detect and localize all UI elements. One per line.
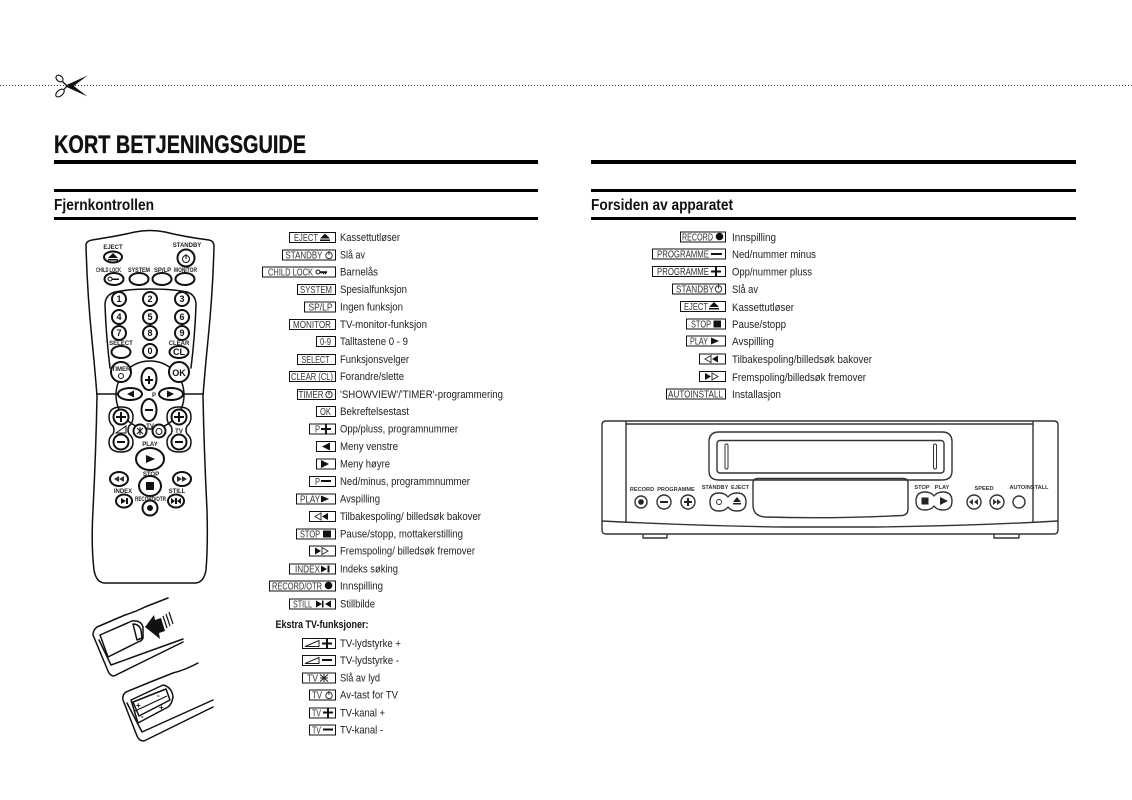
remote control illustration: TV (175, 429, 183, 435)
remote control illustration: 3 (179, 294, 185, 304)
key: tv channel down (310, 724, 383, 736)
key: play: Avspilling (340, 494, 380, 506)
key: standby (672, 284, 758, 296)
illustration: inserting batteries: - (157, 691, 160, 700)
VCR front panel illustration (602, 421, 1058, 538)
key: standby: Slå av (732, 284, 758, 296)
heading: front of the device: Forsiden av apparatet (591, 197, 733, 214)
key: play: PLAY (690, 336, 708, 348)
remote control illustration: MONITOR (174, 268, 198, 274)
VCR front panel illustration: AUTOINSTALL (1010, 485, 1049, 491)
remote control illustration: CLEAR (169, 341, 190, 347)
VCR front panel illustration: PLAY (935, 485, 949, 491)
VCR front panel illustration: PROGRAMME (657, 487, 695, 493)
key: select: SELECT (302, 355, 330, 366)
key: still: STILL (293, 600, 312, 610)
VCR front panel illustration: RECORD (630, 487, 654, 493)
key: clear: CLEAR (CL) (291, 372, 333, 383)
key: sp/lp: Ingen funksjon (340, 302, 403, 314)
remote control illustration: P (152, 393, 156, 399)
key: clear: Forandre/slette (340, 371, 404, 383)
key: programme minus: PROGRAMME (657, 250, 709, 260)
key: fast forward (700, 372, 866, 384)
remote control illustration: 7 (116, 328, 122, 338)
key: system (298, 284, 407, 296)
key: tv power: TV (312, 690, 322, 702)
VCR front panel illustration: EJECT (731, 485, 750, 491)
key: record: RECORD (682, 232, 713, 244)
key: system: Spesialfunksjon (340, 284, 407, 296)
key: record: Innspilling (340, 580, 383, 592)
key: fast forward: Fremspoling/billedsøk fremover (732, 372, 866, 384)
key: child lock (262, 266, 378, 278)
remote control illustration: 6 (179, 312, 185, 322)
key: eject: EJECT (684, 302, 708, 313)
illustration: inserting batteries (123, 663, 213, 741)
key: tv power (310, 690, 399, 702)
remote control illustration: CL (173, 347, 185, 357)
key: stop: Pause/stopp (732, 319, 786, 331)
key: index: INDEX (295, 564, 320, 576)
key: record: RECORD/OTR (272, 582, 322, 592)
key: programme minus (652, 249, 816, 261)
key: eject: Kassettutløser (340, 232, 400, 244)
remote control illustration: PLAY (142, 442, 158, 448)
key: tv mute (302, 672, 380, 684)
key: monitor: TV-monitor-funksjon (340, 319, 427, 331)
key: index: Indeks søking (340, 564, 398, 576)
key: programme minus: Ned/nummer minus (732, 249, 816, 261)
key: standby: Slå av (340, 250, 365, 262)
VCR front panel illustration: STANDBY (702, 485, 729, 491)
key: rewind: Tilbakespoling/billedsøk bakover (732, 354, 872, 366)
key: eject (680, 302, 794, 314)
key: child lock: Barnelås (340, 266, 378, 278)
key: still (290, 598, 375, 610)
key: p plus: P (315, 424, 320, 436)
key: index (290, 564, 398, 576)
key: menu left: Meny venstre (340, 441, 398, 453)
illustration: inserting batteries: + (159, 703, 164, 712)
key: rewind: Tilbakespoling/ billedsøk bakover (340, 511, 481, 523)
key: fast forward: Fremspoling/ billedsøk fremover (340, 546, 475, 558)
key: play (686, 336, 774, 348)
key: tv channel up: TV (312, 708, 321, 720)
key: play: PLAY (300, 494, 320, 506)
key: p minus: Ned/minus, programmnummer (340, 476, 470, 488)
key: 0-9: Talltastene 0 - 9 (340, 336, 408, 348)
key: sp/lp (304, 302, 403, 314)
remote control illustration: EJECT (103, 245, 123, 251)
key: monitor: MONITOR (293, 320, 331, 331)
key: ok (316, 406, 409, 418)
key: tv volume up (302, 638, 401, 650)
remote control illustration: RECORD/OTR (135, 497, 167, 503)
key: programme plus (652, 266, 812, 278)
key: ok: Bekreftelsestast (340, 406, 409, 418)
key: system: SYSTEM (300, 285, 332, 296)
remote control illustration: 5 (147, 312, 153, 322)
key: eject: EJECT (294, 233, 318, 244)
key: tv channel up (310, 708, 385, 720)
key: record (680, 232, 776, 244)
key: record: Innspilling (732, 232, 776, 244)
illustration: opening the battery cover (93, 598, 183, 676)
key: timer: 'SHOWVIEW'/'TIMER'-programmering (340, 389, 503, 401)
key: timer: TIMER (298, 390, 324, 401)
illustration: inserting batteries: - (141, 712, 144, 721)
remote control illustration: 0 (147, 346, 153, 356)
key: ok: OK (320, 407, 331, 418)
remote control illustration: 8 (147, 328, 153, 338)
key: tv channel down: TV-kanal - (340, 724, 383, 736)
remote control illustration: SYSTEM (128, 268, 150, 274)
key: standby: STANDBY (676, 284, 714, 296)
remote control illustration: OK (172, 368, 186, 378)
key: p plus: Opp/pluss, programnummer (340, 424, 458, 436)
key: play (296, 494, 380, 506)
subheading: extra TV functions: Ekstra TV-funksjoner: (276, 619, 368, 631)
key: still: Stillbilde (340, 598, 375, 610)
key: tv channel up: TV-kanal + (340, 708, 385, 720)
key: stop: Pause/stopp, mottakerstilling (340, 528, 463, 540)
key: record (270, 580, 383, 592)
key: clear (290, 371, 404, 383)
key: p minus: P (315, 477, 320, 488)
key list: remote control (262, 232, 503, 736)
remote control illustration: SP/LP (154, 268, 171, 274)
remote control illustration: 9 (179, 328, 185, 338)
remote control illustration: 1 (116, 294, 122, 304)
key: menu left (316, 441, 398, 453)
key: standby: STANDBY (286, 250, 323, 262)
key: stop: STOP (300, 530, 320, 540)
key: sp/lp: SP/LP (308, 302, 333, 314)
remote control illustration: 4 (116, 312, 122, 322)
remote control illustration: INDEX (114, 489, 132, 495)
VCR front panel illustration: STOP (914, 485, 930, 491)
icon: scissors (54, 74, 88, 98)
remote control illustration: TV (146, 424, 154, 430)
key: tv mute: TV (307, 674, 318, 684)
key: select (298, 354, 409, 366)
key: 0-9 (316, 336, 408, 348)
key: menu right (316, 458, 390, 470)
key: 0-9: 0-9 (320, 337, 331, 348)
key: tv volume down: TV-lydstyrke - (340, 655, 399, 667)
key: standby (282, 250, 365, 262)
key: select: Funksjonsvelger (340, 354, 409, 366)
key: play: Avspilling (732, 336, 774, 348)
remote control illustration: 2 (147, 294, 153, 304)
remote control illustration: STILL (169, 489, 186, 495)
key: monitor (290, 319, 427, 331)
key list: front of device (652, 232, 872, 401)
remote control illustration: TIMER (112, 367, 131, 373)
key: programme plus: PROGRAMME (657, 267, 709, 278)
key: tv volume up: TV-lydstyrke + (340, 638, 401, 650)
key: menu right: Meny høyre (340, 458, 390, 470)
key: autoinstall: AUTOINSTALL (668, 390, 723, 400)
remote control illustration: SELECT (109, 341, 133, 347)
illustration: inserting batteries: + (136, 701, 141, 710)
key: autoinstall: Installasjon (732, 389, 781, 401)
key: tv mute: Slå av lyd (340, 672, 380, 684)
key: eject (290, 232, 400, 244)
heading: remote control: Fjernkontrollen (54, 197, 154, 214)
key: stop (296, 528, 463, 540)
key: stop: STOP (691, 320, 711, 330)
key: stop (686, 319, 786, 331)
key: programme plus: Opp/nummer pluss (732, 266, 812, 278)
remote control illustration (86, 230, 214, 583)
key: child lock: CHILD LOCK (268, 268, 313, 278)
remote control illustration: STOP (143, 472, 159, 478)
VCR front panel illustration: SPEED (975, 486, 993, 492)
key: eject: Kassettutløser (732, 302, 794, 314)
remote control illustration: CHILD LOCK (96, 268, 121, 274)
key: autoinstall (666, 389, 781, 401)
title: KORT BETJENINGSGUIDE (54, 131, 306, 159)
key: tv volume down (302, 655, 399, 667)
key: tv power: Av-tast for TV (340, 690, 399, 702)
key: tv channel down: TV (312, 726, 321, 736)
remote control illustration: STANDBY (173, 243, 201, 249)
